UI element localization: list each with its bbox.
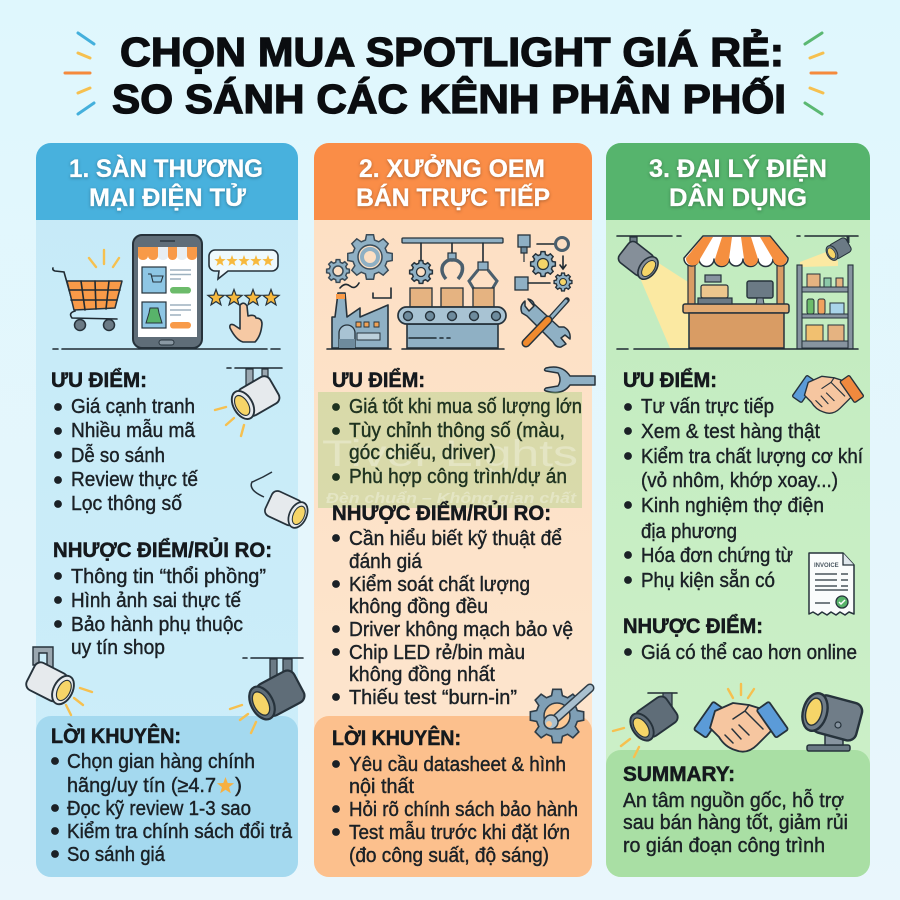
icon: wrench and screwdriver: [521, 299, 570, 347]
panel body: [606, 143, 870, 877]
list: nhuoc diem: Cần hiểu biết kỹ thuật để: [349, 527, 562, 550]
summary text: ro gián đoạn công trình: [623, 834, 825, 857]
list: nhuoc diem: không đồng nhất: [349, 663, 495, 686]
list: loi khuyen: Yêu cầu datasheet & hình: [349, 753, 566, 776]
watermark: Đèn chuẩn – Không gian chất: [326, 490, 577, 507]
icon: smartphone shop: [133, 235, 202, 348]
list: nhuoc diem: Thông tin “thổi phồng”: [71, 565, 266, 588]
list: uu diem: Giá cạnh tranh: [71, 395, 195, 418]
icon: invoice: [809, 553, 854, 615]
list: uu diem: góc chiếu, driver): [349, 441, 496, 464]
heading: summary: SUMMARY:: [623, 763, 735, 786]
list: nhuoc diem: đánh giá: [349, 550, 423, 573]
icon: conveyor belt: [398, 238, 506, 349]
panel heading: 3. ĐẠI LÝ ĐIỆN: [649, 153, 827, 183]
icon: white track spot: [24, 647, 92, 715]
panel body: [314, 143, 592, 877]
icon: invoice: INVOICE: [814, 563, 839, 569]
list: uu diem: Tùy chỉnh thông số (màu,: [349, 419, 565, 442]
list: nhuoc diem: [54, 565, 266, 659]
list: uu diem: Nhiều mẫu mã: [71, 419, 196, 442]
icon: machine parts: [515, 235, 572, 291]
icon: shopping cart: [53, 250, 122, 330]
panel header: [314, 143, 592, 220]
panel: san thuong mai dien tu: [36, 143, 298, 877]
summary text: sau bán hàng tốt, giảm rủi: [623, 811, 848, 834]
icon: left ceiling spot: [616, 236, 681, 283]
list: nhuoc diem: không đồng đều: [349, 595, 488, 618]
heading: nhuoc diem: NHƯỢC ĐIỂM/RỦI RO:: [332, 501, 551, 525]
icon: handshake bottom: [694, 684, 788, 752]
panel heading: BÁN TRỰC TIẾP: [356, 183, 550, 212]
icon: ground line: [53, 348, 280, 350]
heading: uu diem: ƯU ĐIỂM:: [51, 369, 147, 392]
icon: product shelf: [797, 265, 853, 349]
panel heading: [649, 153, 827, 212]
list: uu diem: Phù hợp công trình/dự án: [349, 465, 567, 488]
list: loi khuyen: Kiểm tra chính sách đổi trả: [67, 820, 293, 843]
watermark: [318, 392, 582, 508]
panel heading: 1. SÀN THƯƠNG: [69, 154, 263, 183]
list: nhuoc diem: Hình ảnh sai thực tế: [71, 589, 242, 612]
icon: floor spot: [798, 690, 864, 751]
list: uu diem: Phụ kiện sẵn có: [641, 569, 775, 592]
list: uu diem: Kiểm tra chất lượng cơ khí: [641, 445, 863, 468]
heading: nhuoc diem: NHƯỢC ĐIỂM/RỦI RO:: [53, 538, 272, 562]
list: uu diem: Kinh nghiệm thợ điện: [641, 494, 824, 517]
list: nhuoc diem: uy tín shop: [71, 636, 165, 659]
icon: ground line: [617, 348, 858, 350]
icon: right ceiling spot: [797, 236, 858, 262]
list: loi khuyen: hãng/uy tín (≥4.7: [67, 774, 216, 797]
icon: pointing hand: [230, 303, 262, 342]
heading: nhuoc diem: NHƯỢC ĐIỂM:: [623, 615, 763, 638]
title: SO SÁNH CÁC KÊNH PHÂN PHỐI: [112, 76, 786, 122]
icon: gears: [327, 235, 392, 282]
summary box: [606, 750, 870, 877]
list: nhuoc diem: [332, 527, 573, 709]
list: nhuoc diem: Giá có thể cao hơn online: [641, 641, 857, 664]
list: nhuoc diem: Thiếu test “burn-in”: [349, 686, 517, 709]
list: loi khuyen: (đo công suất, độ sáng): [349, 844, 549, 867]
list: uu diem: [54, 395, 199, 515]
list: loi khuyen: So sánh giá: [67, 843, 166, 866]
icon: handshake top: [792, 375, 864, 413]
list: loi khuyen: Chọn gian hàng chính: [67, 750, 255, 773]
list: uu diem: [332, 395, 582, 488]
list: loi khuyen: nội thất: [349, 775, 414, 798]
icon: light cones: [640, 252, 838, 348]
title: [112, 29, 786, 122]
list: uu diem: địa phương: [641, 520, 737, 543]
summary text: An tâm nguồn gốc, hỗ trợ: [623, 789, 844, 812]
list: uu diem: [624, 395, 863, 592]
list: loi khuyen: Đọc kỹ review 1-3 sao: [67, 797, 251, 820]
icon: rating stars: [208, 290, 279, 305]
list: nhuoc diem: Driver không mạch bảo vệ: [349, 618, 573, 641]
panel heading: [69, 154, 263, 212]
list: nhuoc diem: Chip LED rẻ/bin màu: [349, 641, 525, 664]
list: nhuoc diem: Kiểm soát chất lượng: [349, 573, 530, 596]
heading: uu diem: ƯU ĐIỂM:: [332, 369, 425, 392]
icon: wrench at panel edge: [544, 367, 595, 393]
icon: dark ceiling spot: [613, 693, 680, 757]
list: uu diem: Giá tốt khi mua số lượng lớn: [349, 395, 582, 418]
panel: xuong oem: [314, 143, 595, 877]
list: uu diem: Review thực tế: [71, 468, 199, 491]
watermark: Tiver Lights: [322, 433, 578, 474]
list: loi khuyen: ): [235, 774, 242, 797]
panel body: [36, 143, 298, 877]
list: uu diem: Tư vấn trực tiếp: [641, 395, 774, 418]
list: loi khuyen: Hỏi rõ chính sách bảo hành: [349, 798, 578, 821]
list: uu diem: Dễ so sánh: [71, 444, 165, 467]
list: loi khuyen: Test mẫu trước khi đặt lớn: [349, 821, 570, 844]
panel heading: 2. XƯỞNG OEM: [359, 153, 545, 183]
tip box: [314, 716, 592, 877]
panel heading: MẠI ĐIỆN TỬ: [89, 182, 246, 212]
icon: review bubble: [209, 250, 278, 279]
icon: gear with wrench: [530, 688, 590, 743]
panel heading: [356, 153, 550, 212]
list: loi khuyen: [51, 750, 293, 866]
list: uu diem: Lọc thông số: [71, 492, 182, 515]
icon: dark track spot: [230, 658, 307, 733]
list: uu diem: Xem & test hàng thật: [641, 420, 820, 443]
heading: uu diem: ƯU ĐIỂM:: [623, 369, 717, 392]
icon: factory: [327, 283, 391, 349]
title: CHỌN MUA SPOTLIGHT GIÁ RẺ:: [120, 29, 784, 75]
tip box: [36, 716, 298, 877]
list: uu diem: (vỏ nhôm, khớp xoay...): [641, 469, 838, 492]
list: uu diem: Hóa đơn chứng từ: [641, 544, 793, 567]
heading: loi khuyen: LỜI KHUYÊN:: [332, 726, 461, 750]
panel header: [606, 143, 870, 220]
title rays right: [805, 33, 836, 114]
summary text: [623, 789, 848, 857]
list: nhuoc diem: Bảo hành phụ thuộc: [71, 613, 243, 636]
icon: corded spot: [251, 472, 311, 531]
icon: white ceiling spot: [215, 368, 282, 436]
panel header: [36, 143, 298, 220]
panel: dai ly dien dan dung: [606, 143, 870, 877]
panel heading: DÂN DỤNG: [669, 182, 807, 212]
title rays left: [65, 33, 94, 114]
icon: market stall: [683, 236, 789, 348]
heading: loi khuyen: LỜI KHUYÊN:: [51, 724, 181, 748]
list: loi khuyen: [332, 753, 578, 867]
